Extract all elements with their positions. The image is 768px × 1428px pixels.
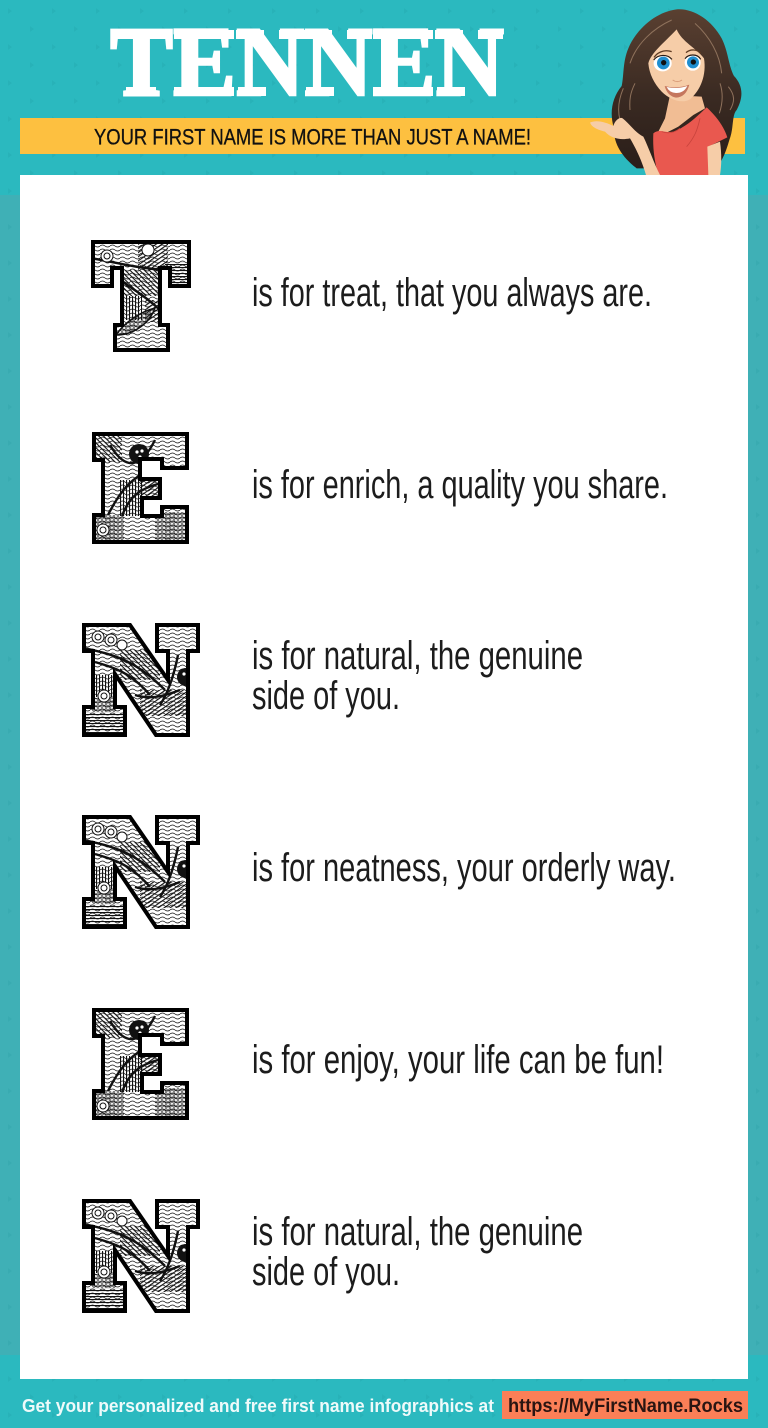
- white content panel: [20, 175, 748, 1379]
- row 5: letter E and phrase: [90, 1006, 664, 1122]
- icon: zentangle letter N: [80, 620, 202, 738]
- smile: [665, 85, 689, 98]
- phrase: side of you.: [252, 674, 400, 718]
- phrase: [252, 634, 583, 718]
- neck and chest: [658, 95, 705, 133]
- phrase: is for natural, the genuine: [252, 634, 583, 678]
- row 4: letter N and phrase: [80, 812, 676, 930]
- icon: cartoon woman presenting: [590, 9, 741, 175]
- hair: [612, 9, 741, 168]
- phrase: [252, 1210, 583, 1294]
- footer link badge: https://MyFirstName.Rocks: [508, 1396, 743, 1417]
- subtitle banner: [20, 118, 745, 154]
- phrase: side of you.: [252, 1250, 400, 1294]
- title: TENNEN: [110, 6, 504, 117]
- row 3: letter N and phrase: [80, 620, 583, 738]
- icon: zentangle letter N: [80, 1196, 202, 1314]
- row 1: letter T and phrase: [90, 240, 652, 352]
- footer call to action: Get your personalized and free first name infographics at: [22, 1396, 494, 1416]
- icon: zentangle letter E: [90, 1006, 192, 1122]
- icon: zentangle letter E: [90, 430, 192, 546]
- icon: zentangle letter N: [80, 812, 202, 930]
- brows: [654, 50, 701, 57]
- arm and hand: [590, 118, 660, 175]
- icon: zentangle letter T: [90, 240, 192, 352]
- phrase: is for natural, the genuine: [252, 1210, 583, 1254]
- eyes: [654, 55, 701, 71]
- face: [648, 29, 705, 101]
- subtitle banner: YOUR FIRST NAME IS MORE THAN JUST A NAME!: [94, 124, 531, 150]
- nose: [673, 80, 682, 82]
- row 2: letter E and phrase: [90, 430, 668, 546]
- shirt: [653, 107, 727, 175]
- row 6: letter N and phrase: [80, 1196, 583, 1314]
